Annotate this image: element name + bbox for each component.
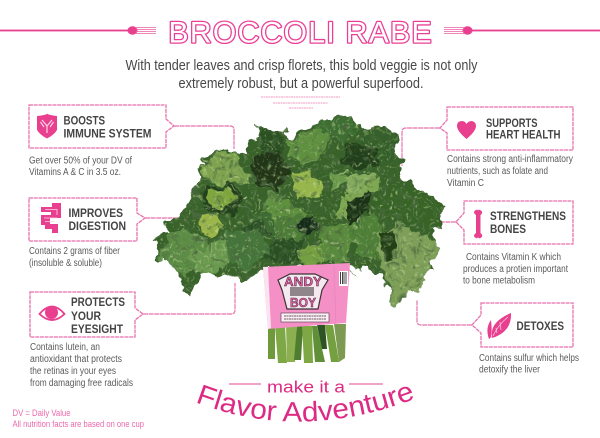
subtitle: With tender leaves and crisp florets, this bold veggie is not only xyxy=(126,57,478,74)
text: bones: to bone metabolism xyxy=(463,276,535,286)
icon: right fork xyxy=(444,26,600,35)
tagline: make it a: make it a xyxy=(267,378,346,396)
subtitle: extremely robust, but a powerful superfood. xyxy=(178,75,424,92)
icon: bone xyxy=(474,210,482,238)
package strip label xyxy=(281,313,329,322)
text: eyesight: the retinas in your eyes xyxy=(30,366,116,377)
fine print under subtitle xyxy=(261,97,340,108)
heading xyxy=(486,118,560,142)
text: detoxes: detoxify the liver xyxy=(479,364,541,376)
text: heart: Vitamin C xyxy=(447,178,484,189)
leaves xyxy=(150,110,450,315)
panel: protects your eyesight xyxy=(30,292,143,337)
heading xyxy=(64,116,152,140)
text: digestion: Contains 2 grams of fiber xyxy=(29,246,121,257)
heading: DIGESTION xyxy=(68,221,126,233)
broccoli rabe bunch photo xyxy=(150,110,450,363)
text: heart: Contains strong anti-inflammatory xyxy=(447,154,573,165)
Andy Boy logo: ANDY xyxy=(284,275,323,289)
heading: DETOXES xyxy=(516,321,564,333)
footnote: DV = Daily Value xyxy=(12,408,70,419)
heading: PROTECTS xyxy=(71,297,125,309)
heading xyxy=(68,208,126,233)
heading: BONES xyxy=(490,224,526,236)
text: detoxes xyxy=(479,353,579,376)
Andy Boy logo: BOY xyxy=(290,296,317,310)
heading: IMMUNE SYSTEM xyxy=(64,128,152,140)
icon: shield xyxy=(37,114,57,138)
icon: eye xyxy=(40,306,64,320)
heading: EYESIGHT xyxy=(71,324,123,336)
text: bones xyxy=(463,252,568,286)
heading xyxy=(71,297,125,336)
icon: left fork xyxy=(0,26,156,35)
heading: SUPPORTS xyxy=(486,118,538,130)
text: immune xyxy=(29,156,132,178)
package sleeve xyxy=(263,263,350,329)
heading: STRENGTHENS xyxy=(490,211,566,223)
connector lines xyxy=(143,126,472,325)
subtitle xyxy=(126,57,478,92)
text: bones: produces a protien important xyxy=(463,264,568,275)
text: eyesight xyxy=(30,342,133,389)
panel: detoxes xyxy=(472,303,573,347)
text: immune: Vitamins A & C in 3.5 oz. xyxy=(29,167,121,178)
text: eyesight: antioxidant that protects xyxy=(30,354,122,365)
tagline: Flavor Adventure: Flavor Adventure xyxy=(197,384,413,422)
text: digestion: (insoluble & soluble) xyxy=(29,258,102,269)
heading: HEART HEALTH xyxy=(486,130,560,142)
tagline: Flavor Adventure xyxy=(197,384,413,422)
text: immune: Get over 50% of your DV of xyxy=(29,156,132,166)
text: heart xyxy=(447,154,573,189)
text: bones: Contains Vitamin K which xyxy=(466,252,561,263)
stems xyxy=(268,324,346,363)
text: heart: nutrients, such as folate and xyxy=(447,166,548,177)
heading: YOUR xyxy=(71,311,102,323)
footnote: All nutrition facts are based on one cup xyxy=(12,419,144,430)
heading: BOOSTS xyxy=(64,116,105,128)
panel: supports heart health xyxy=(440,107,573,150)
icon: leaf xyxy=(487,313,511,339)
heading: IMPROVES xyxy=(68,208,123,220)
title: BROCCOLI RABE xyxy=(168,16,432,50)
footnote xyxy=(12,408,144,430)
Andy Boy logo xyxy=(278,274,328,310)
text: eyesight: from damaging free radicals xyxy=(30,378,133,389)
barcode xyxy=(339,271,348,286)
text: detoxes: Contains sulfur which helps xyxy=(479,353,579,364)
icon: heart xyxy=(457,121,476,139)
panel: boosts immune system xyxy=(29,105,174,148)
icon: intestines xyxy=(41,203,61,233)
heading xyxy=(490,211,566,236)
panel: strengthens bones xyxy=(456,201,573,244)
text: digestion xyxy=(29,246,121,269)
panel: improves digestion xyxy=(29,198,145,241)
text: eyesight: Contains lutein, an xyxy=(30,342,100,353)
